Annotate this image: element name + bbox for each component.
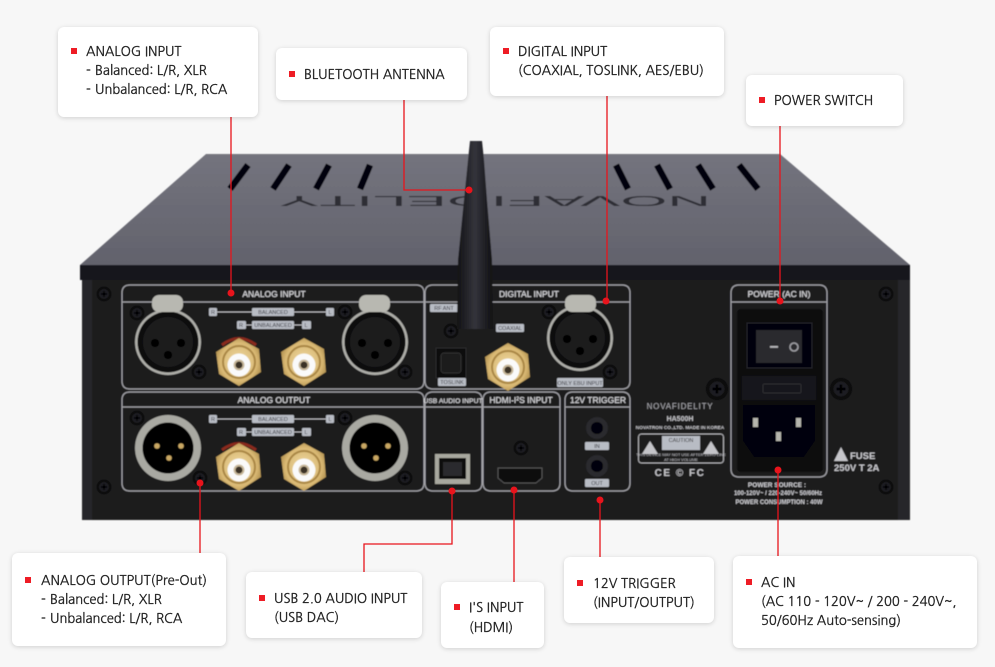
- product label: NOVAFIDELITY: [647, 402, 713, 411]
- callout: analog output: Balanced: L/R, XLR: [50, 593, 162, 606]
- callout: power switch: POWER SWITCH: [774, 94, 873, 107]
- panel: 12v trigger: 12V TRIGGER: [570, 395, 626, 405]
- callout: analog output: Unbalanced: L/R, RCA: [50, 612, 182, 625]
- callout: 12v trigger: (INPUT/OUTPUT): [593, 596, 695, 609]
- antenna: [457, 141, 493, 329]
- product label: CE © FC: [655, 468, 705, 479]
- ventilation slots: [230, 165, 758, 189]
- callout: 12v trigger: [564, 557, 714, 623]
- leader dots: [196, 186, 784, 504]
- panel: hdmi input: [483, 392, 560, 491]
- callout: analog output: [12, 553, 226, 646]
- callout: analog output: -: [41, 612, 46, 625]
- callout: analog output: -: [41, 593, 46, 606]
- panel: analog input: R: [239, 323, 243, 329]
- fuse label: FUSE: [850, 451, 875, 462]
- callout: analog input: Balanced: L/R, XLR: [95, 64, 207, 77]
- panel: analog output: L: [328, 417, 332, 423]
- callout: analog input: [58, 27, 258, 117]
- panel: analog input: L: [328, 310, 332, 316]
- leader lines: [200, 96, 780, 582]
- panel: digital input: DIGITAL INPUT: [499, 289, 559, 299]
- panel: analog input: UNBALANCED: [254, 323, 292, 329]
- panel: digital input: RF ANT: [434, 306, 454, 312]
- product label: NOVATRON CO.,LTD. MADE IN KOREA: [636, 425, 725, 431]
- panel: analog output: UNBALANCED: [254, 430, 292, 436]
- callout: i2s input: [441, 582, 544, 648]
- power source text: POWER SOURCE :: [748, 482, 806, 489]
- callout: analog input: Unbalanced: L/R, RCA: [95, 83, 227, 96]
- callout: analog input: ANALOG INPUT: [86, 45, 182, 58]
- panel: 12v trigger: OUT: [591, 481, 603, 487]
- callout: digital input: [490, 27, 724, 96]
- panel: analog output: BALANCED: [258, 417, 288, 423]
- callout: usb audio input: USB 2.0 AUDIO INPUT: [274, 592, 407, 605]
- callout: digital input: (COAXIAL, TOSLINK, AES/EBU): [518, 64, 704, 77]
- panel: analog input: L: [304, 323, 308, 329]
- product label: [636, 402, 726, 479]
- rear chassis: [80, 265, 910, 520]
- panel: usb audio input: [423, 392, 483, 491]
- callout: power switch: [746, 75, 903, 126]
- panel: digital input: COAXIAL: [498, 326, 522, 332]
- product label: HA500H: [667, 416, 693, 423]
- product label: THIS DEVICE MAY NOT USE AFTER ZERO LINE: [636, 452, 726, 457]
- panel: analog input: [122, 285, 424, 389]
- callout: ac in: [733, 556, 977, 648]
- callout: ac in: 50/60Hz Auto-sensing): [761, 614, 901, 627]
- top cover: [80, 154, 910, 265]
- panel: digital input: [425, 285, 630, 391]
- callout: bluetooth antenna: [276, 48, 467, 100]
- callout: ac in: (AC 110 - 120V~ / 200 - 240V~,: [761, 595, 956, 608]
- fuse label: 250V T 2A: [834, 463, 880, 474]
- panel: usb audio input: USB AUDIO INPUT: [423, 398, 483, 405]
- callout: analog output: ANALOG OUTPUT(Pre-Out): [41, 574, 207, 587]
- product label: CAUTION: [669, 438, 693, 444]
- panel: digital input: TOSLINK: [440, 380, 464, 386]
- callout: bluetooth antenna: BLUETOOTH ANTENNA: [304, 68, 445, 81]
- panel: analog output: L: [304, 430, 308, 436]
- callout: ac in: AC IN: [761, 576, 795, 589]
- power source text: 100-120V~ / 220-240V~ 50/60Hz: [734, 491, 822, 497]
- panel: power ac in: POWER (AC IN): [748, 289, 811, 299]
- engraved logo: NOVAFIDELITY: [279, 192, 711, 209]
- panel: 12v trigger: IN: [594, 444, 600, 450]
- power source text: [734, 482, 823, 506]
- callout: analog input: -: [86, 64, 91, 77]
- panel: digital input: ONLY EBU INPUT: [557, 381, 603, 387]
- callout: digital input: DIGITAL INPUT: [518, 45, 607, 58]
- callout: i2s input: I'S INPUT: [469, 601, 523, 614]
- power source text: POWER CONSUMPTION : 40W: [735, 500, 823, 506]
- callout: 12v trigger: 12V TRIGGER: [593, 577, 676, 590]
- iec socket: [743, 405, 815, 457]
- fuse holder: [742, 376, 816, 400]
- panel: analog output: ANALOG OUTPUT: [238, 395, 310, 405]
- panel: 12v trigger: [565, 392, 630, 491]
- panel: hdmi input: HDMI-I²S INPUT: [489, 395, 553, 405]
- panel: analog input: ANALOG INPUT: [242, 289, 306, 299]
- panel: power ac in: [731, 285, 827, 477]
- panel: analog output: R: [239, 430, 243, 436]
- callout: usb audio input: (USB DAC): [274, 611, 339, 624]
- product label: AT HIGH VOLUME: [664, 457, 698, 462]
- callout: i2s input: (HDMI): [469, 621, 513, 634]
- panel: analog input: BALANCED: [258, 310, 288, 316]
- panel: analog input: R: [211, 310, 215, 316]
- callout: analog input: -: [86, 83, 91, 96]
- fuse label: [834, 447, 880, 474]
- callout: usb audio input: [246, 572, 422, 638]
- rocker switch: [747, 323, 812, 368]
- panel: analog output: [122, 392, 424, 491]
- panel: analog output: R: [211, 417, 215, 423]
